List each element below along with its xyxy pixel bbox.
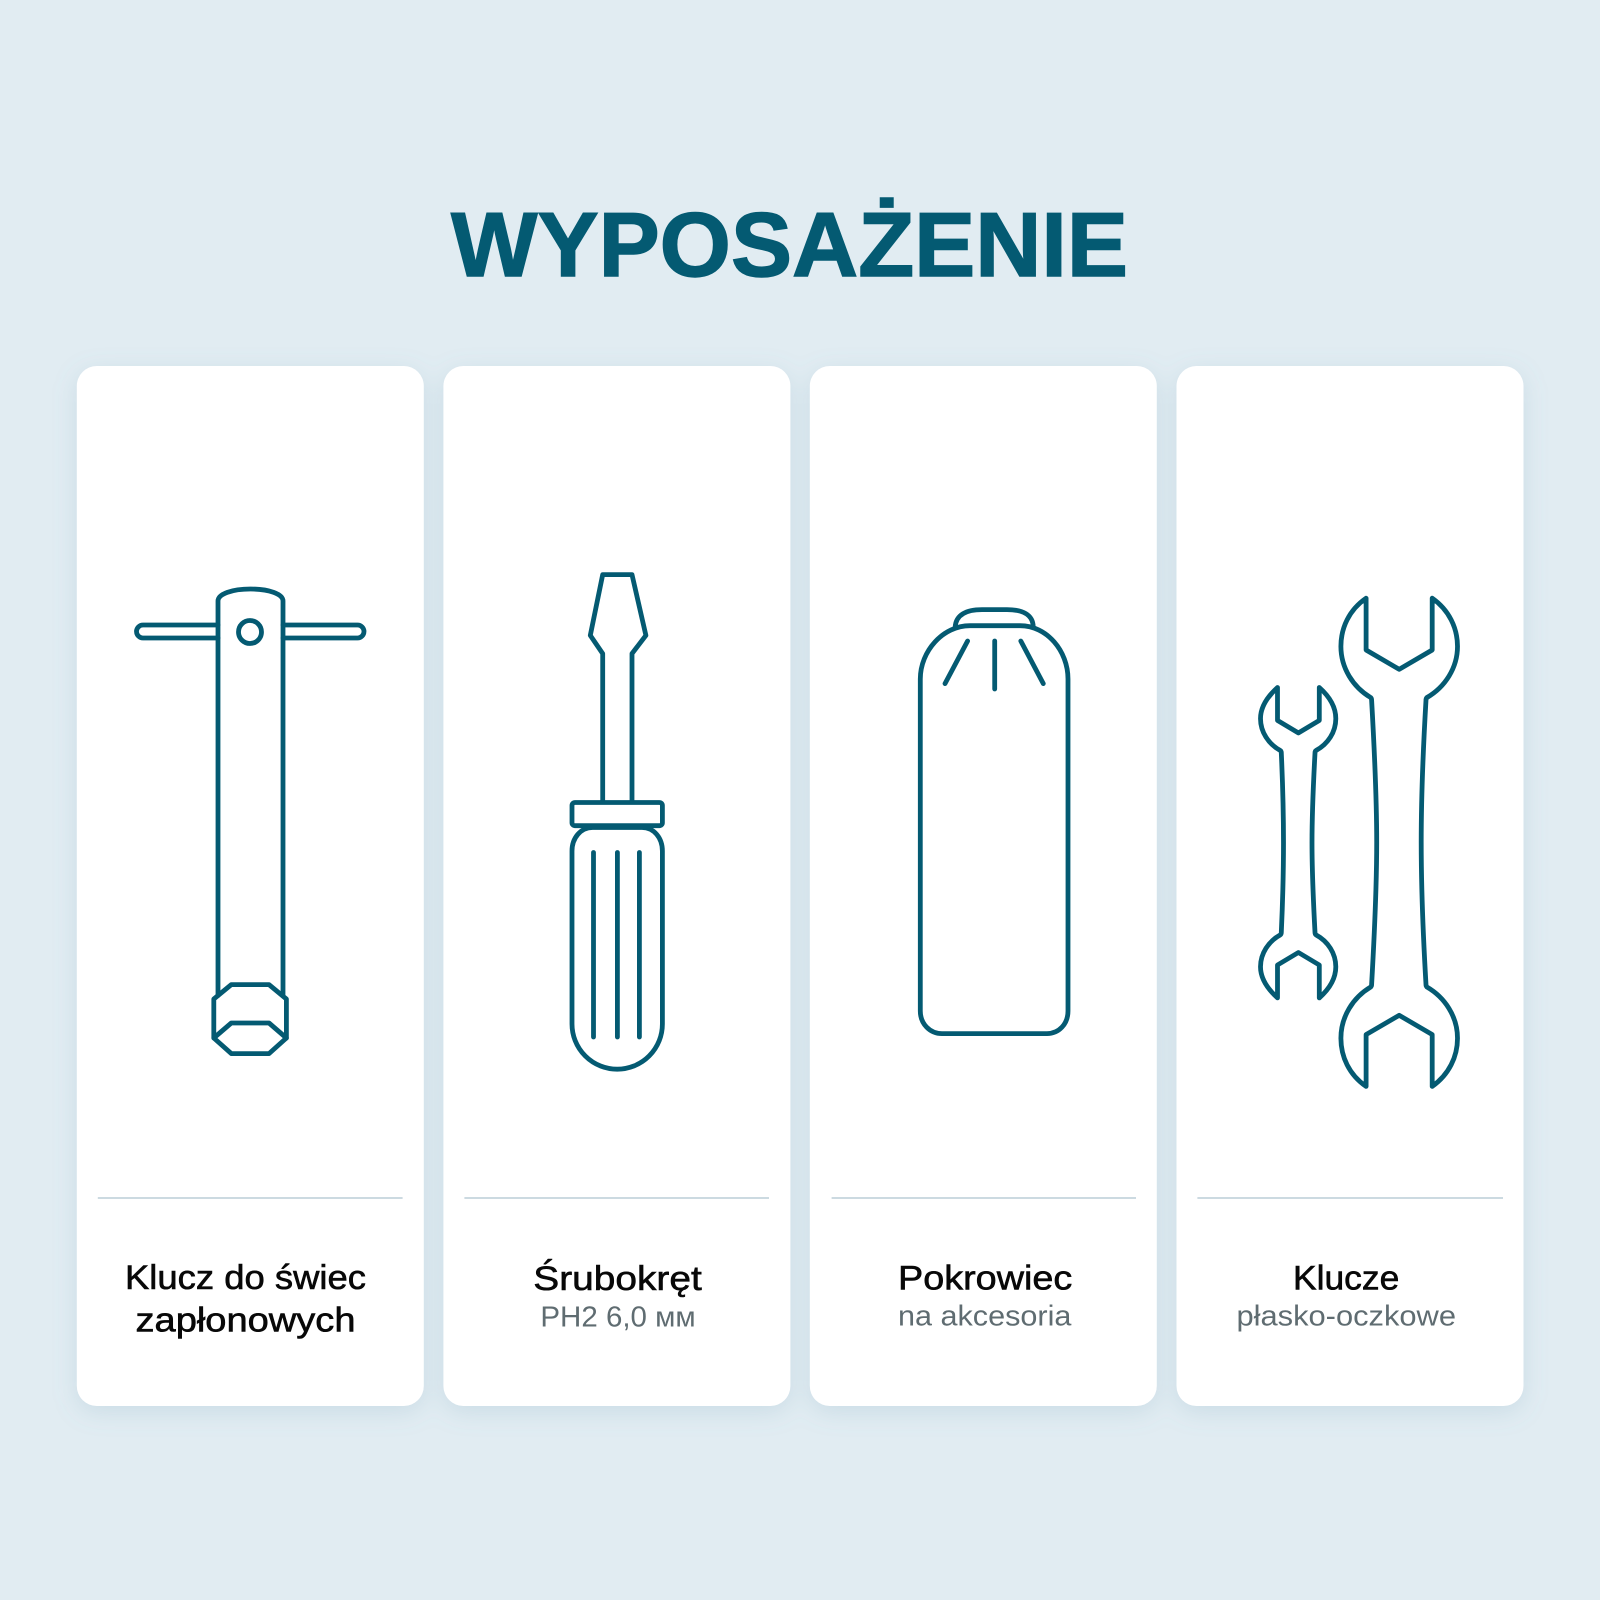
label: wrenches — [1236, 1259, 1456, 1332]
icon: wrenches — [1260, 598, 1458, 1086]
title: WYPOSAŻENIE — [451, 195, 1128, 296]
label: screwdriver: PH2 6,0 мм — [540, 1302, 696, 1334]
label: wrenches: płasko-oczkowe — [1236, 1300, 1456, 1332]
label: accessory bag: Pokrowiec — [898, 1259, 1072, 1297]
label: accessory bag: na akcesoria — [898, 1300, 1072, 1332]
label: spark plug wrench: Klucz do świec — [125, 1259, 366, 1297]
panel: accessory bag — [810, 366, 1157, 1406]
icon: screwdriver — [572, 575, 662, 1069]
panel: spark plug wrench — [77, 366, 424, 1406]
label: screwdriver — [533, 1258, 702, 1334]
panel: screwdriver — [443, 366, 790, 1406]
label: wrenches: Klucze — [1293, 1259, 1399, 1297]
icon: spark plug wrench — [136, 589, 364, 1054]
icon: accessory bag — [920, 610, 1068, 1034]
label: accessory bag — [898, 1259, 1072, 1332]
label: spark plug wrench — [125, 1259, 366, 1340]
label: spark plug wrench: zapłonowych — [136, 1302, 356, 1340]
panel: wrenches — [1176, 366, 1524, 1406]
label: screwdriver: Śrubokręt — [533, 1258, 702, 1298]
